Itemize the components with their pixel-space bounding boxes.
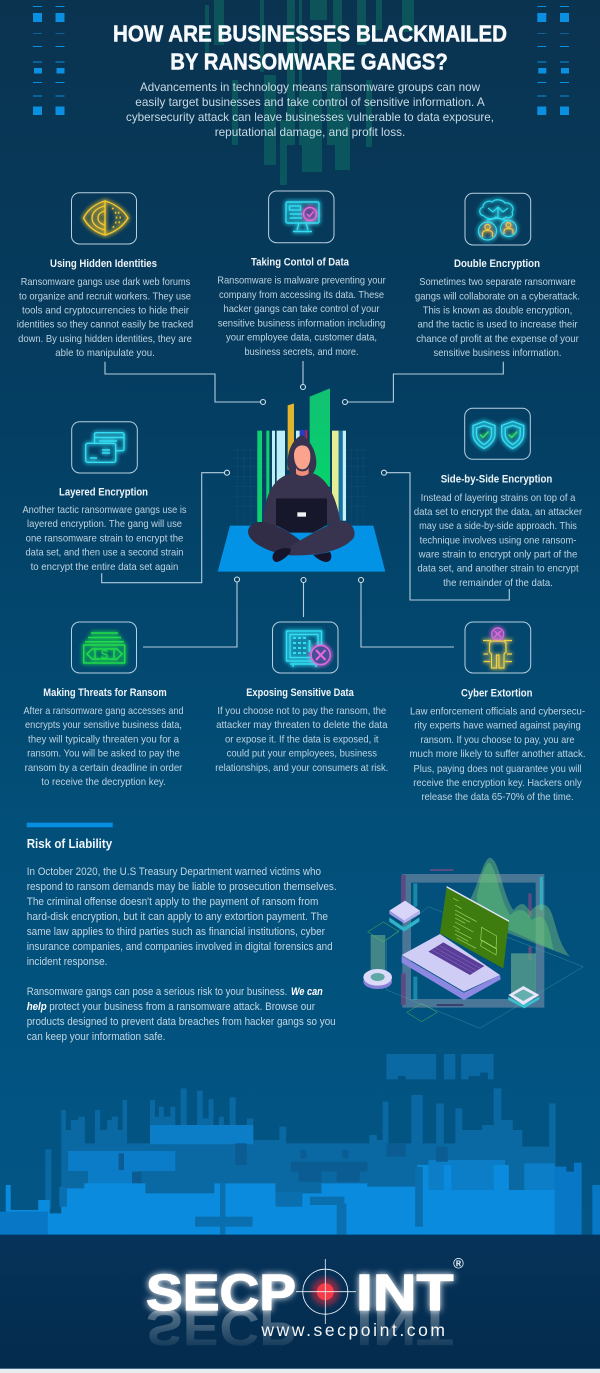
risk paragraph one: hard-disk encryption, but it can apply to any extortion payment. The: [27, 911, 328, 923]
body text: sensitive business information.: [434, 348, 562, 359]
laptop screen: [440, 886, 509, 968]
body text: or expose it. If the data is exposed, it: [225, 734, 379, 746]
green mountain chart: [471, 858, 570, 957]
hooded figure: [248, 435, 355, 562]
body text: they will typically threaten you for a: [28, 734, 179, 746]
panel: exposing sensitive data: [215, 622, 388, 774]
body text: receive the encryption key. Hackers only: [413, 778, 583, 789]
heading: Using Hidden Identities: [50, 258, 157, 270]
illustration: isometric laptop: [363, 858, 583, 1028]
body text: [414, 493, 583, 589]
body text: ransom. If you choose to pay, you are: [420, 735, 575, 746]
body text: able to manipulate you.: [55, 348, 155, 359]
logo target: [296, 1259, 356, 1324]
icon: cash stack: [72, 622, 136, 673]
body text: attacker may threaten to delete the data: [216, 720, 388, 731]
laptop base: [402, 934, 501, 1000]
heading: Taking Contol of Data: [251, 256, 350, 268]
mid layer: [68, 1125, 555, 1235]
logo wordmark: INT: [356, 1264, 454, 1321]
pixel skyline: [0, 1054, 600, 1235]
panel: double encryption: [415, 193, 580, 359]
floating tile: [508, 986, 539, 1008]
floating disc: [363, 969, 392, 989]
body text: After a ransomware gang accesses and: [24, 706, 184, 717]
body text: ransom by a certain deadline in order: [25, 763, 183, 774]
illustration: hooded hacker with laptop: [218, 388, 385, 572]
body text: Instead of layering strains on top of a: [421, 493, 576, 504]
logo reflection: SECP: [146, 1299, 296, 1356]
body text: [24, 706, 184, 788]
title: HOW ARE BUSINESSES BLACKMAILED: [113, 21, 507, 47]
panel: side-by-side encryption: [414, 408, 583, 589]
body text: Sometimes two separate ransomware: [419, 277, 576, 288]
front layer: [0, 1165, 555, 1235]
intro paragraph: cybersecurity attack can leave businesses vulnerable to data exposure,: [126, 110, 494, 124]
body text: data set, and another strain to encrypt: [417, 564, 579, 574]
body text: could put your employees, business: [227, 748, 377, 760]
bottom page edge: [0, 1369, 600, 1373]
body text: business secrets, and more.: [244, 347, 358, 358]
icon: person with cross: [465, 622, 531, 673]
body text: If you choose not to pay the ransom, the: [217, 706, 387, 717]
heading: Exposing Sensitive Data: [246, 687, 354, 699]
body text: [17, 277, 193, 359]
body text: to receive the decryption key.: [41, 777, 166, 788]
risk paragraph two: Ransomware gangs can pose a serious risk to your business.: [27, 986, 287, 998]
body text: your employee data, customer data,: [226, 333, 377, 344]
body text: down. By using hidden identities, they are: [18, 334, 192, 345]
icon: brain and two people: [465, 193, 531, 245]
intro paragraph: [126, 80, 494, 139]
body text: may use a side-by-side approach. This: [419, 521, 577, 532]
body text: [217, 276, 386, 358]
header decoration: right blue dash columns: [537, 6, 569, 115]
body text: [215, 706, 388, 774]
panel: taking control of data: [217, 191, 386, 358]
registered mark: ®: [453, 1256, 464, 1272]
body text: sensitive business information including: [218, 318, 386, 329]
section accent bar: [27, 823, 113, 827]
body text: chance of profit at the expense of your: [416, 334, 579, 345]
logo reflection: INT: [356, 1299, 454, 1356]
risk paragraph one: respond to ransom demands may be liable to prosecution themselves.: [27, 881, 337, 893]
floating cube: [389, 901, 420, 932]
risk paragraph one: [27, 866, 337, 968]
body text: and the tactic is used to increase their: [418, 320, 578, 331]
body text: rity experts have warned against paying: [414, 720, 581, 732]
risk paragraph one: The criminal offense doesn't apply to the payment of ransom from: [27, 896, 318, 908]
body text: Ransomware is malware preventing your: [217, 276, 386, 287]
body text: data set to encrypt the data, an attacker: [414, 507, 583, 518]
heading: Cyber Extortion: [461, 687, 533, 699]
heading: Side-by-Side Encryption: [441, 474, 553, 486]
glitch frame: [403, 870, 541, 1005]
risk paragraph two: help: [27, 1001, 47, 1013]
title: BY RANSOMWARE GANGS?: [170, 48, 448, 74]
body text: Ransomware gangs use dark web forums: [21, 277, 190, 288]
body text: to encrypt the entire data set again: [31, 562, 178, 573]
intro paragraph: easily target businesses and take control of sensitive information. A: [135, 95, 485, 109]
body text: Law enforcement officials and cybersecu-: [410, 706, 585, 718]
laptop: [276, 498, 327, 533]
intro paragraph: reputational damage, and profit loss.: [215, 125, 405, 139]
logo: SECPOINT: [146, 1256, 464, 1356]
pixel texture in front layer: [59, 1167, 423, 1235]
header decoration: faint green bars: [205, 0, 414, 185]
body text: [415, 277, 580, 359]
header decoration: left blue dash columns: [33, 6, 64, 115]
intro paragraph: Advancements in technology means ransomware groups can now: [140, 80, 480, 94]
body text: to organize and recruit workers. They use: [19, 291, 191, 302]
connector lines to central figure: [102, 361, 509, 647]
body text: [410, 706, 586, 803]
risk paragraph one: In October 2020, the U.S Treasury Department warned victims who: [27, 866, 321, 878]
body text: data set, and then use a second strain: [26, 548, 184, 558]
logo reflection: [146, 1299, 454, 1356]
body text: the remainder of the data.: [443, 578, 553, 589]
risk paragraph one: same law applies to third parties such as financial institutions, cyber: [27, 926, 325, 938]
risk paragraph two: We can: [291, 986, 323, 998]
body text: technique involves using one ransom-: [420, 536, 576, 546]
risk paragraph one: insurance companies, and companies involved in digital forensics and: [27, 941, 333, 953]
heading: risk of liability: Risk of Liability: [27, 836, 113, 851]
icon: eye: [72, 193, 136, 244]
body text: identities so they cannot easily be tracked: [17, 320, 193, 331]
body text: Another tactic ransomware gangs use is: [22, 505, 186, 516]
body text: hacker gangs can take control of your: [224, 304, 380, 315]
dark pixel patches: [119, 1143, 448, 1183]
body text: one ransomware strain to encrypt the: [26, 534, 184, 544]
body text: This is known as double encryption,: [423, 306, 572, 316]
icon: two shields: [465, 408, 530, 459]
heading: Making Threats for Ransom: [43, 687, 167, 699]
heading: Layered Encryption: [59, 486, 148, 498]
title: [113, 21, 507, 74]
icon: cash stack: S: [100, 648, 109, 662]
right edge layer: [0, 1163, 600, 1235]
green data blocks: [371, 935, 536, 998]
body text: encrypts your sensitive business data,: [25, 720, 182, 731]
data bars: [257, 388, 346, 522]
body text: Plus, paying does not guarantee you will: [414, 764, 582, 775]
floor mat: [218, 526, 385, 572]
risk paragraph two: products designed to prevent data breaches from hacker gangs so you: [27, 1016, 336, 1028]
risk paragraph two: protect your business from a ransomware attack. Browse our: [49, 1001, 315, 1013]
logo wordmark: SECP: [146, 1264, 296, 1321]
outline diamonds: [368, 907, 583, 1028]
icon: stacked cards: [72, 422, 137, 473]
body text: release the data 65-70% of the time.: [421, 792, 574, 803]
backdrop grid: [233, 448, 367, 526]
panel: layered encryption: [22, 422, 186, 573]
body text: ware strain to encrypt only part of the: [418, 550, 578, 560]
back layer: [45, 1054, 556, 1235]
risk paragraph two: [27, 986, 336, 1043]
body text: layered encryption. The gang will use: [27, 519, 182, 530]
body text: much more likely to suffer another attack.: [410, 749, 586, 760]
body text: tools and cryptocurrencies to hide their: [22, 306, 190, 316]
logo wordmark: [146, 1264, 454, 1321]
body text: [22, 505, 186, 573]
footer band: [0, 1235, 600, 1369]
panel: cyber extortion: [410, 622, 586, 803]
panel: making threats for ransom: [24, 622, 184, 788]
risk paragraph one: incident response.: [27, 956, 107, 968]
risk paragraph two: can keep your information safe.: [27, 1031, 165, 1043]
body text: company from accessing its data. These: [219, 290, 384, 301]
icon: safe with cross: [272, 622, 338, 673]
website: www.secpoint.com: [260, 1320, 445, 1340]
body text: gangs will collaborate on a cyberattack.: [415, 291, 580, 302]
heading: Double Encryption: [454, 258, 540, 270]
icon: monitor: [269, 191, 334, 243]
panel: using hidden identities: [17, 193, 193, 359]
body text: relationships, and your consumers at risk.: [215, 763, 388, 774]
body text: ransom. You will be asked to pay the: [27, 748, 180, 760]
